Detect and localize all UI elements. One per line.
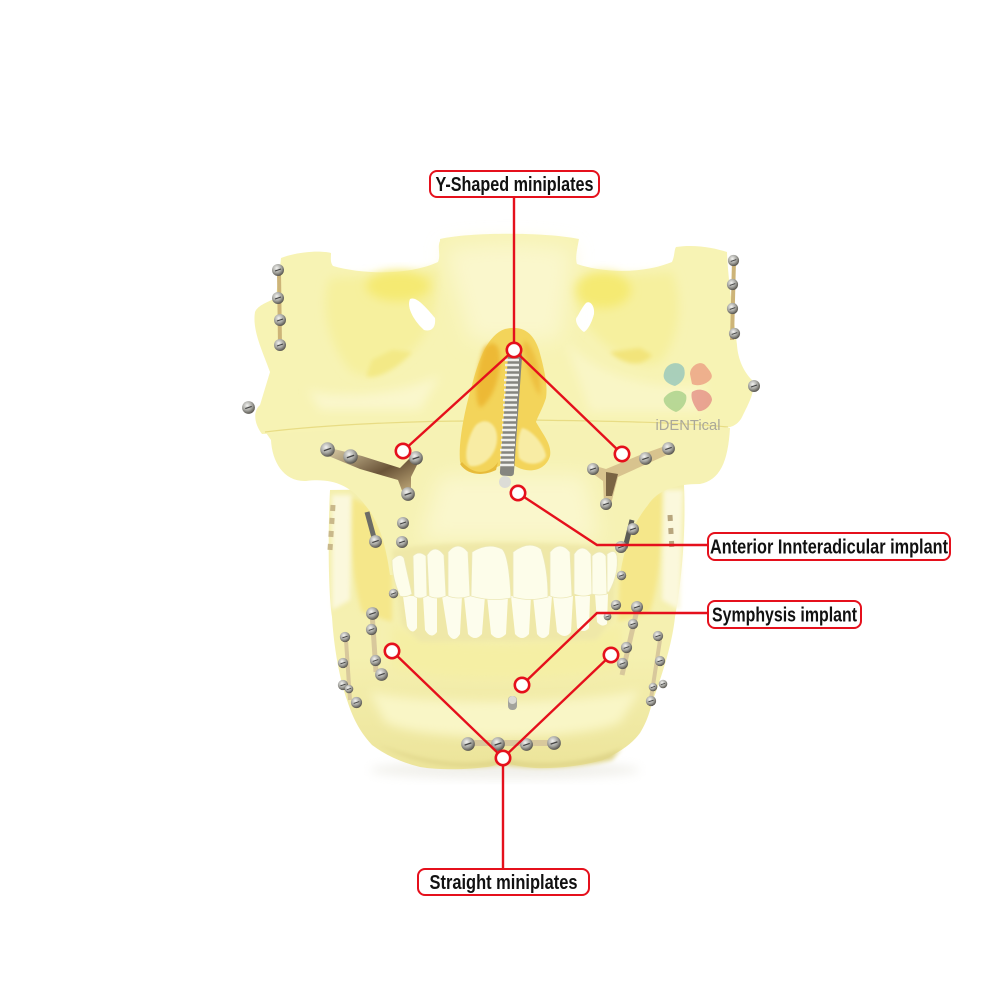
illustration: jaw model photo <box>242 234 760 779</box>
callout leader lines <box>392 197 708 869</box>
teeth <box>392 542 617 642</box>
watermark logo <box>656 363 720 434</box>
miniplate: chin <box>461 736 561 751</box>
spring implant <box>499 352 522 488</box>
left orbit <box>325 268 438 377</box>
side screws and hardware <box>330 505 672 598</box>
screw chain: left temple <box>242 264 286 414</box>
upper jaw and zygoma <box>264 420 730 575</box>
label: Symphysis implant <box>708 601 861 628</box>
miniplate: upper right Y <box>587 442 675 510</box>
cranium <box>254 234 753 434</box>
ground shadow <box>370 761 640 779</box>
lower teeth <box>403 594 608 639</box>
brow and cheek highlights <box>308 244 705 540</box>
ramus gaps <box>351 498 392 622</box>
label: Y-Shaped miniplates: Y-Shaped miniplates <box>436 174 594 196</box>
chin highlight band <box>370 690 640 737</box>
watermark logo: iDENTical <box>656 417 720 434</box>
callout markers <box>385 343 629 765</box>
label: Anterior Innteradicular implant <box>708 533 950 560</box>
right orbit <box>572 272 679 365</box>
seam between cranium and maxilla <box>265 420 728 432</box>
label: Straight miniplates: Straight miniplates <box>430 872 578 894</box>
lower jaw front <box>392 622 622 678</box>
label: Symphysis implant: Symphysis implant <box>712 604 857 626</box>
dentition backdrop <box>392 542 616 642</box>
miniplate: upper left Y <box>320 442 423 501</box>
mandible <box>329 485 685 769</box>
nasal aperture <box>460 328 550 474</box>
symphysis implant screw <box>508 696 517 710</box>
right orbital fissure <box>576 302 594 332</box>
label: Anterior Innteradicular implant: Anterior Innteradicular implant <box>710 536 948 558</box>
upper teeth <box>392 545 617 600</box>
miniplate: lower right <box>604 600 667 706</box>
ramus highlights <box>332 495 351 610</box>
miniplate: lower left <box>338 607 388 708</box>
left orbital fissure <box>409 298 435 330</box>
screw chain: right temple <box>727 255 760 392</box>
